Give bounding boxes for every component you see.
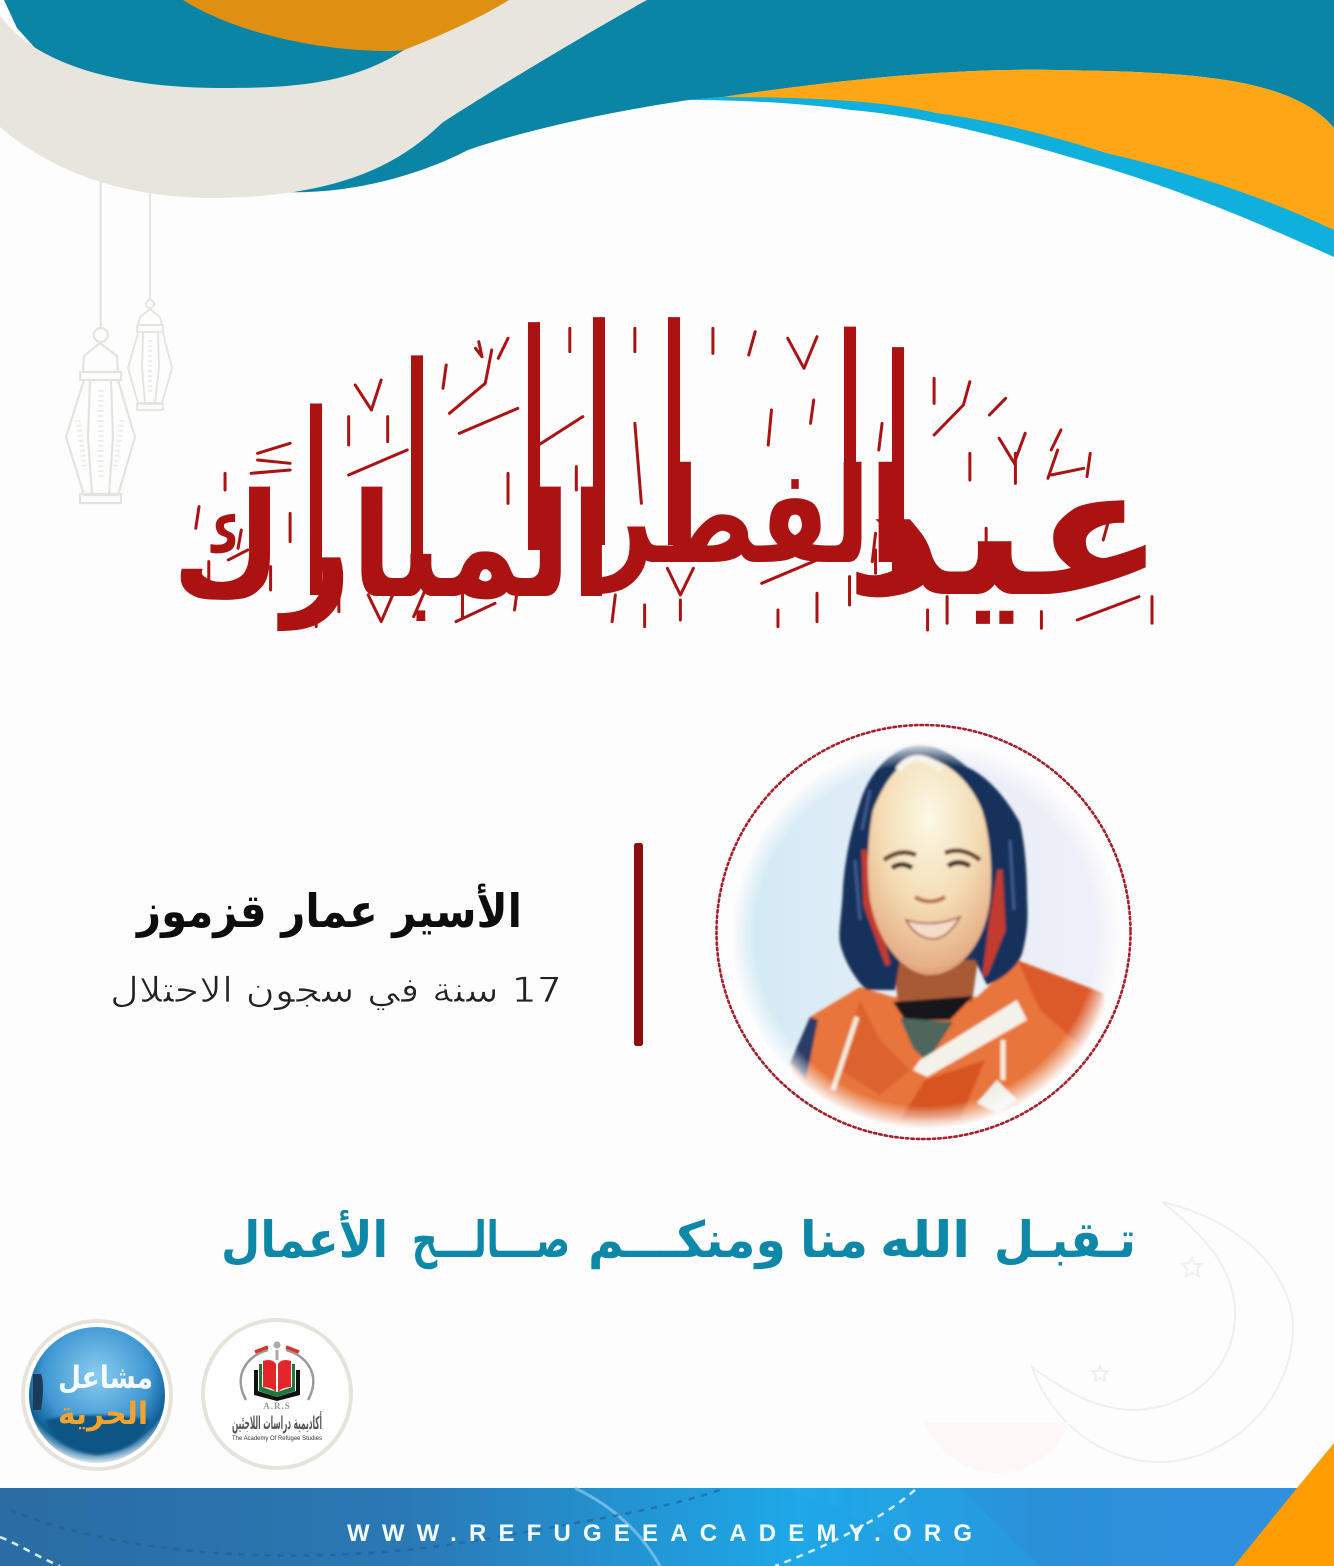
top wave banner (0, 0, 1334, 257)
neck (893, 960, 978, 1002)
academy english name: The Academy Of Refugee Studies (232, 1436, 322, 1442)
word: al-Mubarak: المبارك (172, 463, 612, 631)
prisoner name: الأسير عمار قزموز (135, 883, 522, 938)
tall alef and lam strokes: ا (886, 298, 910, 647)
word 4: ومنكـــم (588, 1211, 786, 1270)
logo: Academy of Refugee Studies: أكاديمية دراسات اللاجئين (232, 1411, 322, 1434)
portrait photo (732, 741, 1120, 1140)
emblem book (254, 1370, 300, 1401)
emblem initials: A.R.S (263, 1401, 291, 1411)
calligraphy ornaments (196, 328, 1152, 630)
word 6: الأعمال (221, 1209, 388, 1269)
tall alef and lam strokes (304, 268, 910, 655)
zip placket (913, 1000, 1027, 1077)
shirt (900, 1018, 953, 1062)
drawstrings (833, 1017, 1003, 1090)
footer band (0, 1443, 1334, 1566)
wave: dark orange (183, 0, 509, 51)
tall alef and lam strokes: ا (838, 279, 862, 620)
website url: WWW.REFUGEEACADEMY.ORG (347, 1520, 972, 1547)
lanterns (66, 180, 172, 503)
word: Eid: عيد (845, 427, 1165, 637)
calligraphy title (172, 268, 1165, 655)
tall alef and lam strokes: ا (662, 268, 686, 617)
logo: Mashaal al-Hurriya (23, 1321, 171, 1469)
logo: Mashaal al-Hurriya: الحرية (58, 1396, 148, 1432)
logo: Academy of Refugee Studies (203, 1320, 351, 1468)
hood (839, 745, 1028, 990)
tall alef and lam strokes: ا (405, 310, 429, 631)
brows (884, 851, 980, 860)
tall alef and lam strokes: ا (522, 273, 546, 622)
moon decoration (925, 1202, 1293, 1473)
emblem wreath (241, 1350, 313, 1400)
word: al-Fitr: الفطر (591, 440, 905, 594)
tall alef and lam strokes: ا (587, 268, 611, 617)
small lantern (128, 193, 172, 410)
shirt collar (893, 996, 973, 1020)
face (868, 757, 991, 975)
divider bar (634, 843, 643, 1046)
wave: orange (723, 70, 1334, 230)
portrait: dotted frame (716, 725, 1130, 1139)
years in prison: 17 سنة في سجون الاحتلال (110, 971, 562, 1011)
greeting line (221, 1209, 1136, 1270)
mouth (906, 917, 960, 939)
footer corner triangle (1234, 1443, 1334, 1566)
eyes (892, 862, 970, 868)
jacket (790, 960, 1112, 1140)
large lantern (66, 180, 135, 503)
jacket fold (900, 1060, 985, 1120)
tall alef and lam strokes: ا (304, 362, 328, 655)
hairline (898, 759, 942, 770)
word 5: صـــالـــح (412, 1211, 570, 1270)
tag (977, 1080, 1017, 1113)
wave: cyan (689, 90, 1334, 257)
wave: beige (0, 0, 647, 198)
word 2: الله (880, 1211, 970, 1269)
word 3: منا (800, 1211, 868, 1269)
wave: teal (4, 0, 1334, 192)
logo text: مشاعل (58, 1360, 153, 1396)
word 1: تـقبـل (994, 1211, 1136, 1269)
nose (915, 897, 945, 902)
